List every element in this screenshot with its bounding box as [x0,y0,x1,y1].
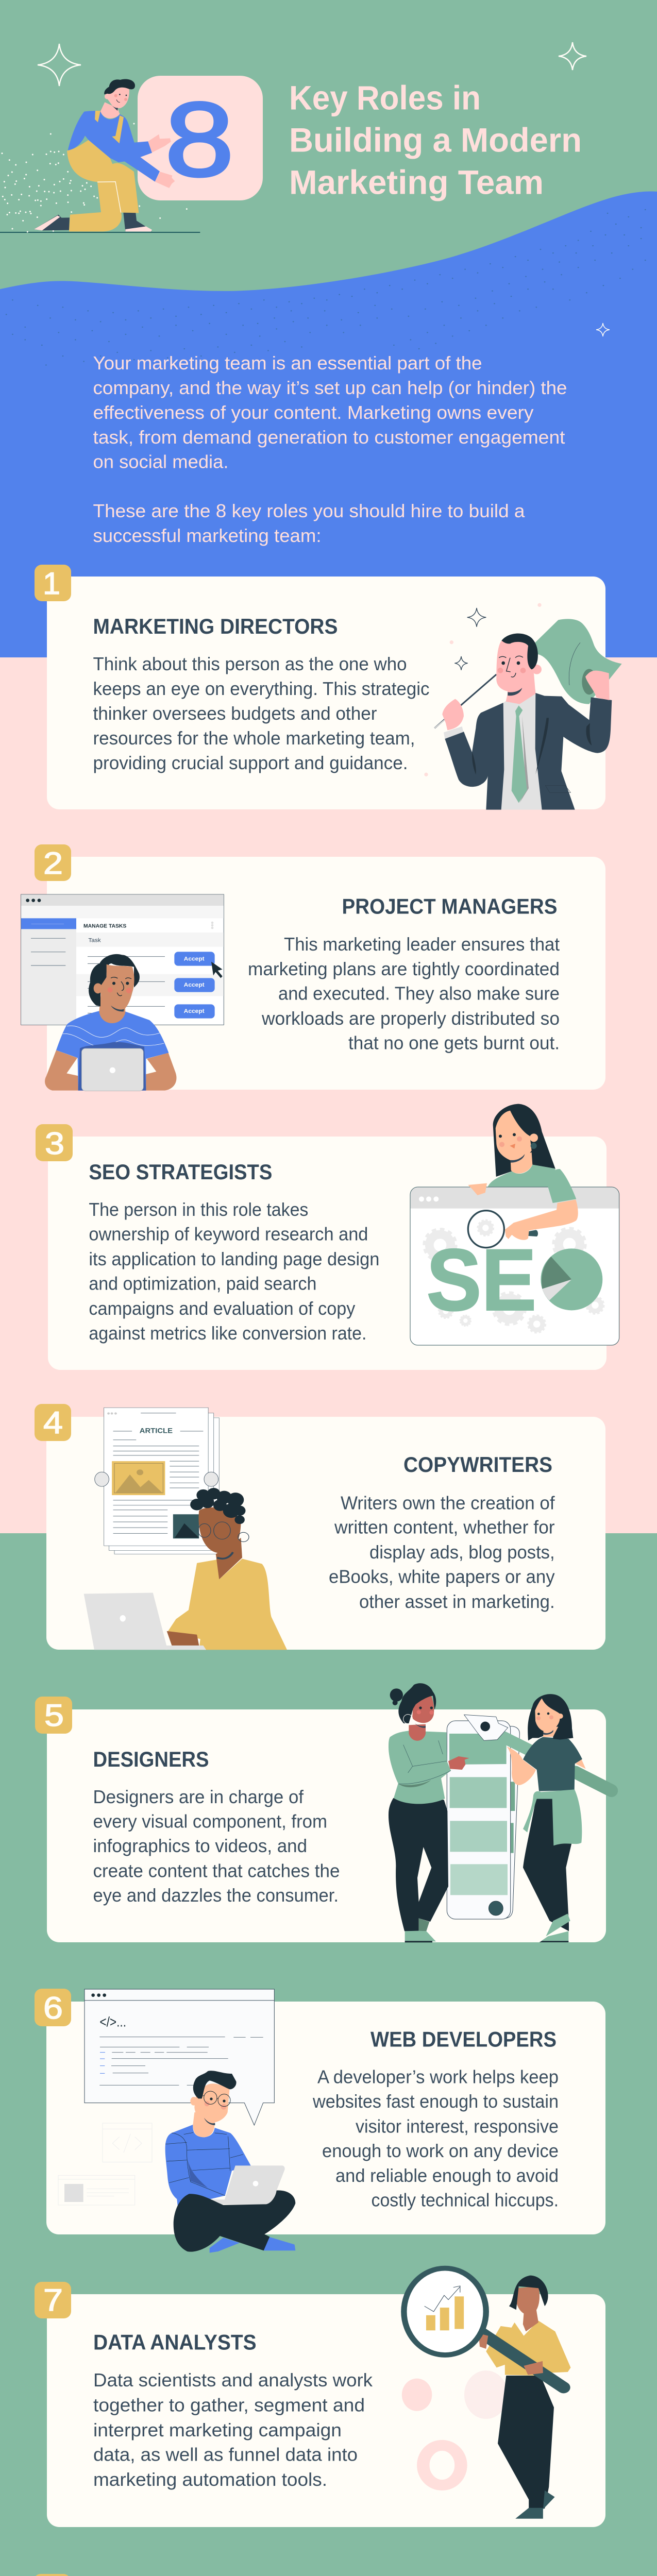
body text: that no one gets burnt out. [348,1032,560,1053]
body text [93,1786,340,1906]
number badge 1: 1 [43,566,60,601]
number badge 2 [35,844,71,881]
body text [329,1492,555,1612]
illustration: SEO browser window and woman [410,1104,619,1345]
number badge 3: 3 [45,1126,64,1161]
body text: and optimization, paid search [89,1273,316,1294]
illustration: task window and man with laptop: MANAGE TASKS [83,924,126,929]
body text: create content that catches the [93,1860,340,1882]
illustration: task window and man with laptop: Task [88,937,101,943]
body text: its application to landing page design [89,1248,379,1269]
body text: ownership of keyword research and [89,1223,368,1245]
heading: SEO strategists: SEO STRATEGISTS [89,1160,272,1184]
body text: eye and dazzles the consumer. [93,1885,339,1906]
illustration: kneeling man [0,79,200,233]
body text: marketing plans are tightly coordinated [248,958,560,979]
number badge 6 [35,1989,71,2026]
illustration: director with flag [424,603,622,810]
number badge 7: 7 [43,2283,63,2317]
body text: costly technical hiccups. [371,2190,559,2211]
body text: interpret marketing campaign [93,2419,342,2441]
title: Key Roles in [289,79,481,117]
body text: campaigns and evaluation of copy [89,1298,355,1319]
number badge 6: 6 [43,1991,63,2025]
number badge 2: 2 [43,846,63,880]
body text: keeps an eye on everything. This strategic [93,678,430,699]
panel: role 6 web developers [35,1989,605,2253]
number badge 1 [35,565,71,601]
header wave [0,191,657,365]
illustration: code window and developer [58,1989,295,2253]
body text [89,1199,379,1344]
big number 8 badge [138,76,263,200]
panel: role 4 copywriters [35,1404,605,1650]
body text: thinker oversees budgets and other [93,703,377,724]
intro text: company, and the way it’s set up can help (or hinder) the [93,377,567,398]
panel: role 5 designers [35,1683,612,1942]
body text: resources for the whole marketing team, [93,727,415,749]
intro text [93,352,567,546]
body text: This marketing leader ensures that [284,934,560,955]
illustration: two designers with phone and pen [389,1683,612,1942]
body text: data, as well as funnel data into [93,2444,358,2465]
panel: role 2 project managers [21,844,605,1091]
body text: other asset in marketing. [359,1591,555,1612]
number badge 8 [33,2574,71,2576]
title: Marketing Team [289,163,544,201]
body text: every visual component, from [93,1810,327,1832]
panel: role 3 SEO strategists [36,1104,619,1370]
number badge 4 [35,1404,71,1441]
body text: websites fast enough to sustain [312,2091,559,2112]
body text: A developer’s work helps keep [317,2066,559,2088]
illustration: article pages and writer with laptop: ARTICLE [140,1427,173,1435]
body text: Writers own the creation of [341,1492,555,1513]
illustration: task window and man with laptop [21,894,224,1091]
heading: copywriters: COPYWRITERS [403,1452,552,1477]
body text: and executed. They also make sure [278,982,560,1004]
intro text: on social media. [93,451,229,472]
number badge 3 [36,1124,73,1161]
number badge 7 [35,2282,71,2318]
intro text: task, from demand generation to customer engagement [93,427,565,448]
title: Building a Modern [289,121,582,159]
body text: together to gather, segment and [93,2394,365,2415]
intro text: successful marketing team: [93,525,322,546]
body text: The person in this role takes [89,1199,308,1220]
body text: against metrics like conversion rate. [89,1323,366,1344]
body text: Designers are in charge of [93,1786,304,1807]
heading: marketing directors: MARKETING DIRECTORS [93,614,338,638]
body text: visitor interest, responsive [356,2116,559,2137]
number badge 5: 5 [44,1698,64,1733]
heading: data analysts: DATA ANALYSTS [93,2330,257,2354]
big number 8 badge: 8 [165,81,234,198]
body text: Data scientists and analysts work [93,2369,373,2391]
heading: project managers: PROJECT MANAGERS [342,894,558,918]
illustration: task window and man with laptop: Accept [184,956,205,962]
illustration: task window and man with laptop: Accept [184,982,205,988]
illustration: code window and developer: </>... [99,2014,126,2029]
body text [248,934,560,1053]
body text: providing crucial support and guidance. [93,752,408,773]
sparkle stars in header [38,42,610,336]
body text: enough to work on any device [322,2140,559,2161]
panel: role 1 marketing directors [35,565,622,810]
intro text: Your marketing team is an essential part of the [93,352,482,374]
panel: role 8 PR specialists [33,2574,604,2576]
heading: designers: DESIGNERS [93,1747,209,1771]
illustration: task window and man with laptop: Accept [184,1008,205,1014]
body text [312,2066,559,2211]
intro text: These are the 8 key roles you should hire to build a [93,500,525,521]
number badge 4: 4 [43,1405,63,1440]
body text: eBooks, white papers or any [329,1566,555,1587]
body text: written content, whether for [334,1516,555,1537]
body text: infographics to videos, and [93,1835,307,1856]
panel: role 7 data analysts [35,2268,605,2527]
illustration: article pages and writer with laptop [84,1408,287,1650]
body text: marketing automation tools. [93,2469,327,2490]
body text [93,653,430,773]
heading: web developers: WEB DEVELOPERS [370,2027,557,2052]
number badge 5 [35,1697,72,1734]
body text: workloads are properly distributed so [261,1008,560,1029]
body text [93,2369,373,2490]
illustration: analyst with magnifier and charts [402,2268,570,2519]
body text: display ads, blog posts, [369,1541,555,1563]
illustration: SEO browser window and woman: SE [427,1231,536,1329]
body text: Think about this person as the one who [93,653,407,674]
body text: and reliable enough to avoid [335,2165,559,2186]
title [289,79,582,201]
intro text: effectiveness of your content. Marketing owns every [93,402,534,423]
